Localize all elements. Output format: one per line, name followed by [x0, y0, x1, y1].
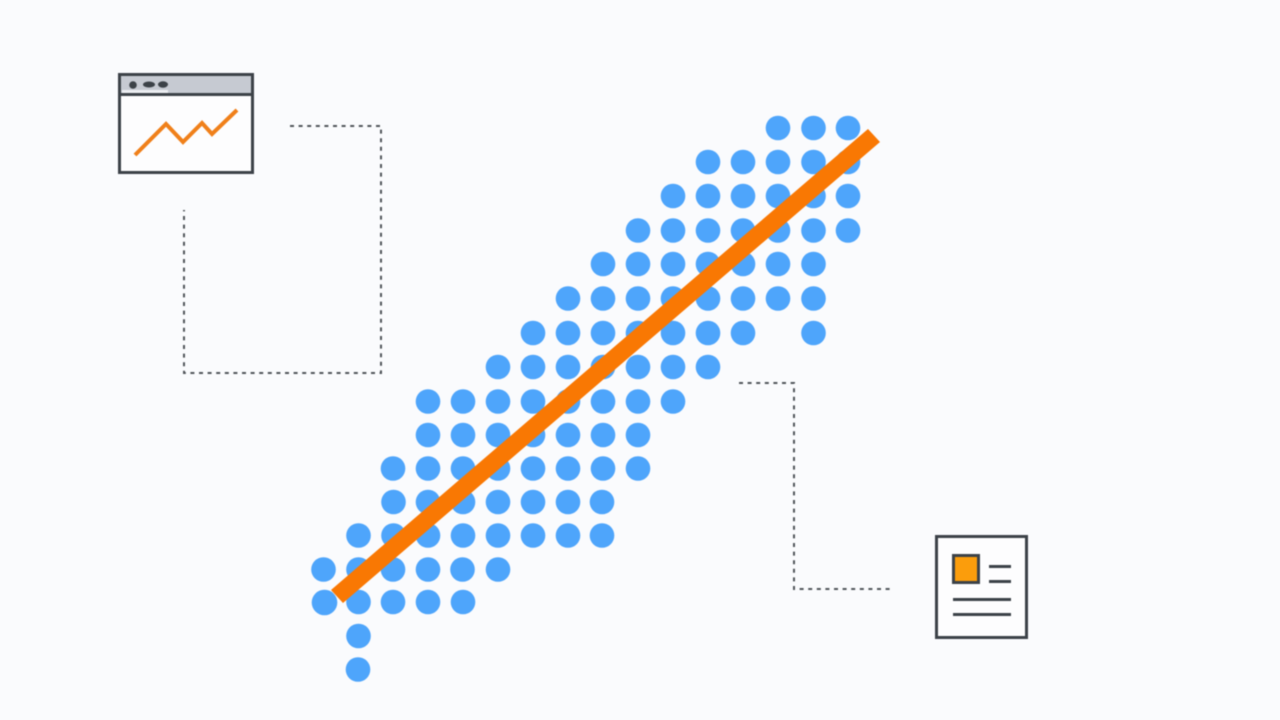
connector: dotted path from chart window [184, 126, 381, 373]
icon: browser window with line chart [120, 74, 252, 172]
connector: dotted path to document [739, 383, 892, 589]
scatter plot dots [311, 116, 860, 682]
icon: document with image and text lines [936, 536, 1026, 638]
regression line [331, 129, 880, 603]
